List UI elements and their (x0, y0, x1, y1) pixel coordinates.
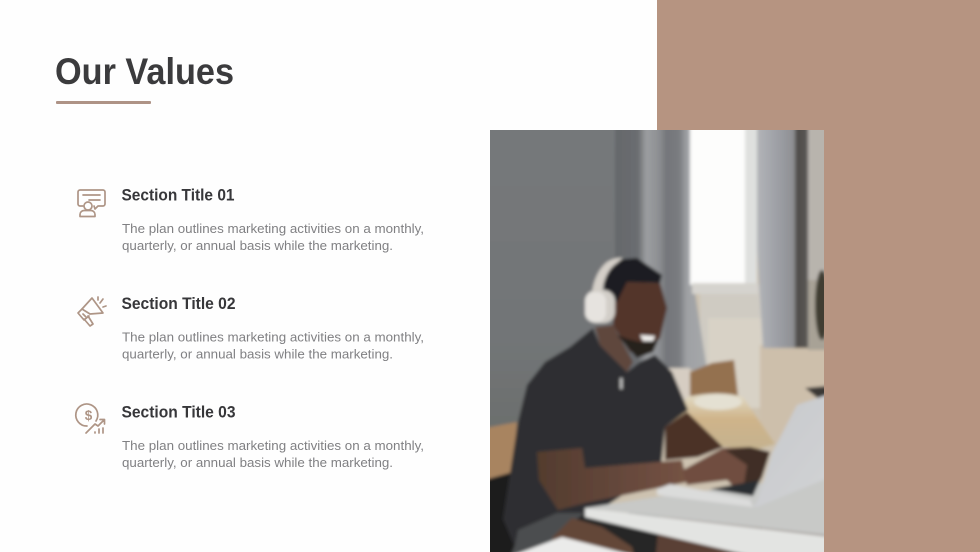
table (586, 480, 824, 537)
section 02 (78, 295, 424, 362)
section text 03 (122, 438, 424, 470)
section text 03: The plan outlines marketing activities on a monthly, (122, 438, 424, 453)
icon: megaphone (78, 297, 106, 326)
section text 02: The plan outlines marketing activities on a monthly, (122, 330, 424, 344)
background panel: tan block (657, 0, 980, 552)
section text 01: The plan outlines marketing activities on a monthly, (122, 221, 424, 236)
shorts and leg (508, 513, 585, 552)
white corner bottom (500, 537, 652, 552)
section text 01: quarterly, or annual basis while the marketing. (122, 238, 393, 253)
icon: dollar growth: $ (85, 408, 93, 423)
section heading 01: Section Title 01 (122, 186, 234, 204)
section 01 (78, 186, 424, 253)
shirt (503, 328, 688, 547)
icon: dollar growth (76, 404, 104, 433)
neck (595, 325, 633, 372)
far forearm (665, 412, 723, 460)
near arm (537, 448, 687, 510)
section text 02 (122, 330, 424, 362)
hand (682, 446, 750, 488)
laptop (657, 484, 753, 507)
title underline (56, 101, 151, 104)
icon: presentation speech board (78, 190, 105, 216)
section heading 03: Section Title 03 (122, 404, 236, 422)
section text 02: quarterly, or annual basis while the marketing. (122, 346, 393, 362)
photo: man with headphones working on a laptop (490, 130, 824, 552)
face (613, 282, 667, 353)
headphones (592, 258, 623, 292)
section text 03: quarterly, or annual basis while the marketing. (122, 455, 393, 470)
section 03 (76, 404, 424, 470)
section heading 02: Section Title 02 (122, 295, 236, 313)
title: Our Values (55, 51, 234, 92)
section text 01 (122, 221, 424, 253)
